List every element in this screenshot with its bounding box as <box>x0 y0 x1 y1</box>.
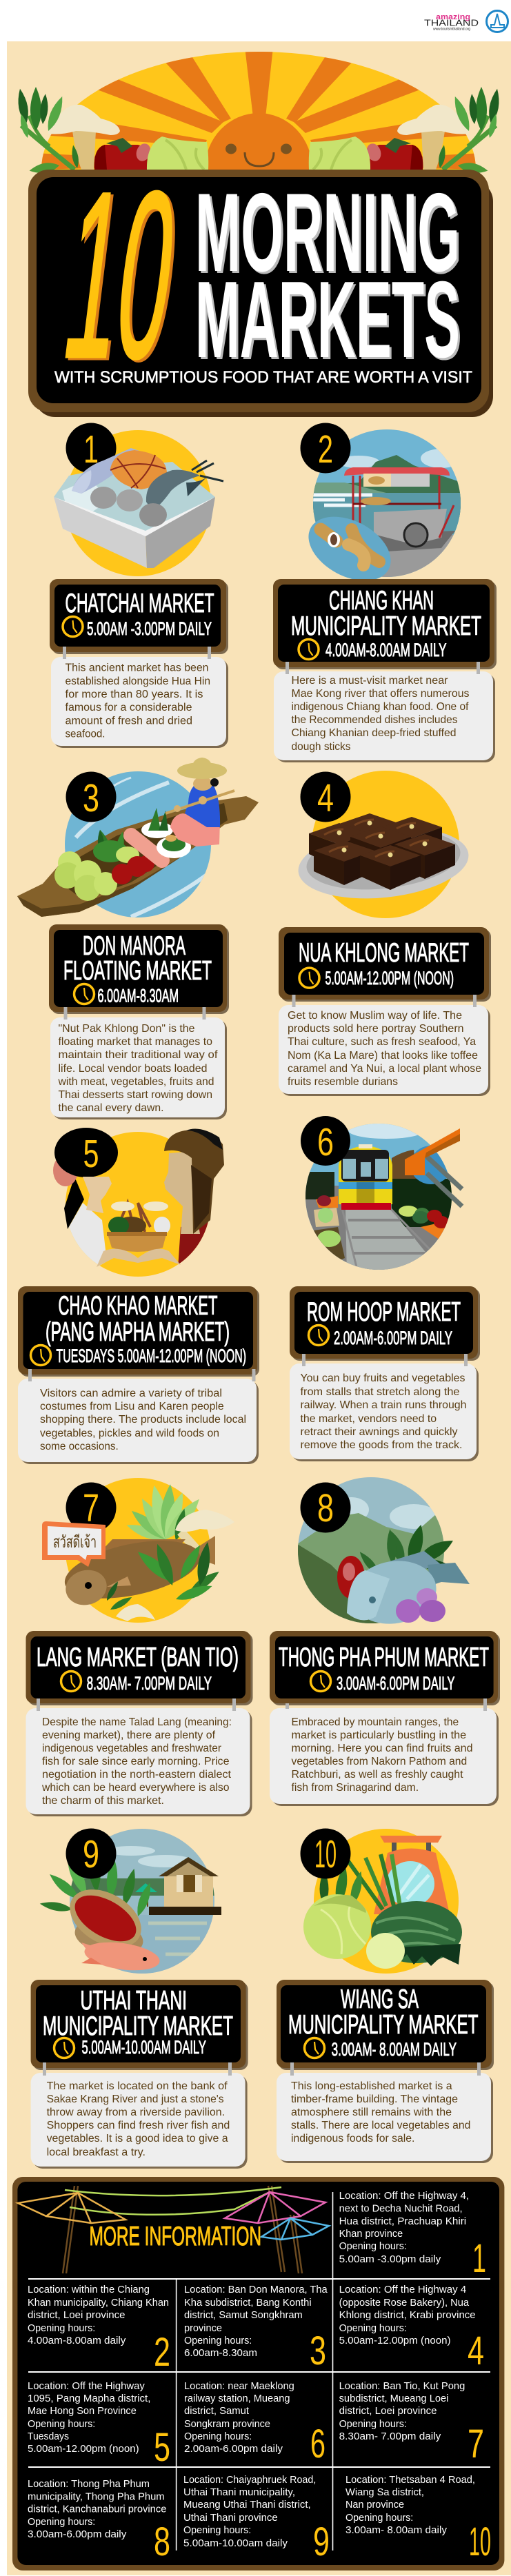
info: market 9 <box>183 2474 330 2564</box>
info: market 1: 1 <box>472 2236 486 2281</box>
onion <box>366 1933 405 1969</box>
info: market 2: district, Loei province <box>28 2309 126 2321</box>
board frame <box>28 170 493 417</box>
illustration: dessert plate <box>294 771 472 918</box>
description <box>18 1369 259 1464</box>
sign: uthai thani: 5.00AM-10.00AM DAILY <box>81 2037 206 2058</box>
info: market 10: Opening hours: <box>345 2512 413 2524</box>
info: market 6: Songkram province <box>184 2418 270 2430</box>
info: market 6: 2.00am-6.00pm daily <box>184 2443 283 2455</box>
info: market 8: 8 <box>154 2519 170 2564</box>
info: market 8: 3.00am-6.00pm daily <box>28 2528 127 2540</box>
market 2 <box>273 423 497 762</box>
illustration: tribal women with basket <box>53 1128 224 1277</box>
description: Get to know Muslim way of life. The <box>288 1010 462 1022</box>
sign: uthai thani: MUNICIPALITY MARKET <box>43 2011 233 2041</box>
market 4 <box>279 771 491 1096</box>
description: the canal every dawn. <box>58 1102 164 1114</box>
big number 10 <box>52 143 191 410</box>
info: market 9: 9 <box>313 2519 330 2564</box>
description: floating market that manages to <box>58 1036 212 1048</box>
description <box>31 2062 248 2169</box>
sign: uthai thani: UTHAI THANI <box>80 1986 187 2016</box>
info: market 6: 6 <box>310 2422 325 2466</box>
description: retract their awnings and quickly <box>301 1426 458 1438</box>
info: market 5: Opening hours: <box>28 2418 95 2430</box>
illustration: tribal women with basket: 5 <box>83 1132 99 1176</box>
description: with meat, vegetables, fruits and <box>58 1076 214 1088</box>
info: market 6 <box>184 2380 325 2466</box>
info: market 1: 5.00am -3.00pm daily <box>339 2253 441 2265</box>
clock icon <box>54 2038 74 2058</box>
description <box>277 2062 493 2163</box>
sign: wiang sa <box>277 1980 494 2070</box>
illustration: floating market boat <box>17 758 259 917</box>
basket of food <box>97 1201 181 1267</box>
sign: uthai thani <box>31 1980 248 2070</box>
info: market 7: Location: Ban Tio, Kut Pong <box>339 2380 465 2392</box>
pink fish <box>81 1938 161 1974</box>
market 9 <box>31 1828 248 2169</box>
illustration: seafood box <box>54 423 223 576</box>
description: which can be heard everywhere is also <box>41 1782 230 1794</box>
description: products sold here portray Southern <box>288 1023 464 1035</box>
description: This long-established market is a <box>291 2080 452 2092</box>
info: market 4: 4 <box>468 2329 484 2373</box>
plate of dough sticks <box>298 504 401 594</box>
food stall <box>344 467 454 547</box>
clock icon <box>30 1346 51 1365</box>
market 8 <box>270 1477 500 1806</box>
clock icon <box>61 1671 81 1692</box>
sign: don manora <box>49 924 229 1014</box>
info: market 3: Kha subdistrict, Bang Konthi <box>184 2297 312 2309</box>
description: Thai culture, such as fresh seafood, Ya <box>288 1036 476 1048</box>
description: railway. When a train runs through <box>301 1399 466 1411</box>
awning <box>405 1128 462 1206</box>
description: famous for a considerable <box>65 702 192 713</box>
info: market 10: Nan province <box>345 2499 404 2511</box>
clock icon <box>309 1325 328 1346</box>
illustration: railway market <box>301 1116 462 1275</box>
info: market 3: district, Samut Songkhram <box>184 2309 303 2321</box>
description: vegetables. It is a good idea to give a <box>47 2133 228 2144</box>
heading: MORE INFORMATION <box>90 2222 261 2251</box>
sign: chao khao: (PANG MAPHA MARKET) <box>46 1317 230 1347</box>
info: market 4: (opposite Rose Bakery), Nua <box>339 2297 470 2309</box>
info: market 7: 7 <box>468 2422 484 2466</box>
description: local breakfast a try. <box>47 2147 146 2158</box>
sack of chili <box>60 1878 151 1960</box>
info: market 2 <box>28 2284 170 2375</box>
sign: chiang khan: CHIANG KHAN <box>329 586 434 616</box>
description: the Recommended dishes includes <box>291 714 458 726</box>
sign: don manora: DON MANORA <box>83 931 186 961</box>
info: market 2: 2 <box>154 2330 170 2375</box>
description: seafood. <box>65 729 105 740</box>
speech bubble <box>42 1521 106 1567</box>
market 3 <box>17 758 259 1119</box>
info: market 8: district, Kanchanaburi province <box>28 2503 166 2515</box>
info: market 9: Opening hours: <box>183 2524 251 2536</box>
lettuce <box>147 136 208 170</box>
title board: 10 <box>52 143 188 408</box>
speech bubble: สวัสดีเจ้า <box>53 1533 97 1552</box>
info: market 5: Mae Hong Son Province <box>28 2405 137 2417</box>
description: indigenous Chiang khan food. One of <box>291 701 469 713</box>
info: market 2: 4.00am-8.00am daily <box>28 2335 126 2346</box>
description: evening market), there are plenty of <box>42 1730 216 1741</box>
description <box>290 1354 479 1461</box>
sign: thong pha phum <box>270 1631 500 1705</box>
description: indigenous foods for sale. <box>291 2133 414 2144</box>
info: market 8 <box>28 2478 170 2564</box>
boat <box>17 796 259 917</box>
mushroom <box>48 105 120 170</box>
info: market 4: 5.00am-12.00pm (noon) <box>339 2335 451 2346</box>
sign: lang market <box>26 1631 252 1705</box>
description: fish for sale since early morning. Price <box>42 1756 230 1767</box>
sign: chatchai market: 5.00AM -3.00PM DAILY <box>87 618 212 639</box>
description: life. Local vendor boats loaded <box>58 1063 207 1075</box>
sign: chao khao: TUESDAYS 5.00AM-12.00PM (NOON) <box>57 1346 246 1366</box>
market 6 <box>290 1116 480 1461</box>
stilt house <box>135 1857 221 1915</box>
herbs <box>16 87 80 176</box>
logo: amazing thailand: www.tourismthailand.org <box>433 28 470 32</box>
description: Ratchburi, as well as freshly caught <box>291 1769 463 1781</box>
sign: lang market: LANG MARKET (BAN TIO) <box>37 1643 239 1672</box>
beans <box>371 1901 462 1966</box>
info: market 5 <box>28 2380 170 2470</box>
description: remove the goods from the track. <box>301 1439 462 1451</box>
spring onions <box>348 1854 400 1909</box>
info: market 1: next to Decha Nuchit Road, <box>339 2202 463 2214</box>
info: market 1: Khan province <box>339 2228 403 2240</box>
illustration: fish and herbs <box>42 1478 234 1623</box>
illustration: fish and herbs: 7 <box>83 1486 99 1530</box>
info: market 8: Opening hours: <box>28 2516 95 2528</box>
description: Shoppers can find fresh river fish and <box>47 2120 230 2131</box>
info: market 4: Location: Off the Highway 4 <box>339 2284 466 2295</box>
smiling sun <box>205 113 312 226</box>
description <box>274 662 495 762</box>
info: market 6: railway station, Mueang <box>184 2393 290 2404</box>
description <box>50 1007 227 1119</box>
description: stalls. There are local vegetables and <box>291 2120 470 2131</box>
info: market 5: 5.00am-12.00pm (noon) <box>28 2443 139 2455</box>
description: the charm of this market. <box>42 1795 164 1807</box>
info: market 5: Tuesdays <box>28 2431 69 2442</box>
info: market 3: province <box>184 2322 222 2334</box>
sign: chatchai market: CHATCHAI MARKET <box>65 589 214 618</box>
chalk umbrellas <box>18 2186 329 2273</box>
description: dough sticks <box>291 741 350 753</box>
vegetables left <box>16 87 208 176</box>
goods on boat <box>54 808 191 901</box>
info: market 3: 3 <box>310 2329 326 2373</box>
description <box>26 1698 252 1816</box>
info: market 7 <box>339 2380 484 2466</box>
sign: chatchai market <box>50 579 228 654</box>
header logos <box>424 11 508 32</box>
description: timber-frame building. The vintage <box>291 2093 458 2105</box>
sun rays <box>41 52 476 170</box>
panel: more information <box>12 2177 504 2570</box>
info: market 2: Opening hours: <box>28 2322 95 2334</box>
info: market 3: Opening hours: <box>184 2335 252 2346</box>
description: Mae Kong river that offers numerous <box>291 688 469 700</box>
description: fish from Srinagarind dam. <box>291 1782 419 1794</box>
illustration: seafood box: 1 <box>83 427 99 471</box>
illustration: riverside house and chili: 9 <box>83 1832 99 1876</box>
illustration: mountains and fish: 8 <box>317 1486 334 1530</box>
info: market 8: Location: Thong Pha Phum <box>28 2478 150 2490</box>
sun illustration <box>18 52 499 173</box>
description: established alongside Hua Hin <box>65 676 210 687</box>
info: market 3: Location: Ban Don Manora, Tha <box>184 2284 328 2295</box>
description: Visitors can admire a variety of tribal <box>40 1388 222 1399</box>
description: amount of fresh and dried <box>65 716 192 727</box>
info: market 9: Location: Chaiyaphruek Road, <box>183 2474 316 2486</box>
info: market 6: Location: near Maeklong <box>184 2380 294 2392</box>
info: market 5: 1095, Pang Mapha district, <box>28 2393 150 2404</box>
description: negotiation in the north-eastern dialect <box>42 1769 232 1781</box>
clock icon <box>299 640 319 659</box>
title board <box>28 143 493 417</box>
market 1 <box>50 423 228 748</box>
info: market 3: 6.00am-8.30am <box>184 2347 257 2359</box>
illustration: riverside stall: 2 <box>318 427 333 471</box>
illustration: riverside house and chili <box>39 1828 221 1977</box>
illustration: riverside stall <box>301 423 461 579</box>
info: market 4: Khlong district, Krabi province <box>339 2309 476 2321</box>
description: Embraced by mountain ranges, the <box>291 1716 459 1728</box>
description: vegetables, pickles and wild foods on <box>40 1428 219 1439</box>
description: "Nut Pak Khlong Don" is the <box>58 1023 195 1035</box>
clock icon <box>310 1671 331 1692</box>
sign: wiang sa: WIANG SA <box>341 1985 419 2014</box>
sign: rom hoop <box>290 1286 480 1361</box>
description: Despite the name Talad Lang (meaning: <box>42 1716 232 1728</box>
description: Nom (Ka La Mare) that looks like toffee <box>288 1050 478 1062</box>
logo: amazing thailand <box>424 13 479 32</box>
description: some occasions. <box>40 1441 119 1452</box>
clock icon <box>63 616 83 637</box>
description: indigenous vegetables and freshwater <box>42 1743 222 1754</box>
info: market 10: Wiang Sa district, <box>345 2486 424 2498</box>
info: market 7: Opening hours: <box>339 2418 407 2430</box>
illustration: dessert plate: 4 <box>317 776 334 820</box>
info: market 10: Location: Thetsaban 4 Road, <box>345 2474 475 2486</box>
description: You can buy fruits and vegetables <box>301 1372 465 1384</box>
sign: don manora: FLOATING MARKET <box>63 956 212 986</box>
info: market 2: Khan municipality, Chiang Khan <box>28 2297 169 2309</box>
info: market 7: 8.30am- 7.00pm daily <box>339 2431 441 2442</box>
description: the market, vendors need to <box>301 1413 437 1425</box>
description: This ancient market has been <box>65 662 208 674</box>
description: Thai desserts start rowing down <box>58 1089 212 1101</box>
info: market 10: 3.00am- 8.00am daily <box>345 2524 448 2536</box>
info: market 4: Opening hours: <box>339 2322 407 2334</box>
illustration: railway market: 6 <box>317 1120 334 1164</box>
info: market 7: district, Loei province <box>339 2405 437 2417</box>
sign: chiang khan <box>273 579 497 669</box>
description: throw away from a riverside pavilion. <box>47 2107 225 2118</box>
description: The market is located on the bank of <box>47 2080 228 2092</box>
vendor <box>166 758 234 846</box>
description <box>270 1698 499 1806</box>
description: costumes from Lisu and Karen people <box>40 1401 224 1412</box>
illustration: floating market boat: 3 <box>83 776 99 820</box>
cabbage <box>303 1894 371 1959</box>
train <box>339 1144 392 1210</box>
info: market 3 <box>184 2284 328 2373</box>
sign: nua khlong <box>279 927 491 1002</box>
info: market 2: Location: within the Chiang <box>28 2284 150 2295</box>
description: Here is a must-visit market near <box>291 675 448 687</box>
info: market 10 <box>345 2474 491 2564</box>
illustration: scale and vegetables <box>301 1828 462 1974</box>
info: market 6: Opening hours: <box>184 2431 252 2442</box>
info: market 7: subdistrict, Mueang Loei <box>339 2393 448 2404</box>
info: market 9: Mueang Uthai Thani district, <box>183 2499 311 2511</box>
info: market 1 <box>339 2190 486 2281</box>
info: market 9: Uthai Thani municipality, <box>183 2486 295 2498</box>
logo: blue seal <box>487 11 508 32</box>
info: market 9: Uthai Thani province <box>183 2512 278 2524</box>
illustration: scale and vegetables: 10 <box>314 1832 337 1876</box>
info: market 4 <box>339 2284 484 2373</box>
weighing scale <box>374 1836 450 1914</box>
title board: 10 <box>55 145 191 410</box>
description: vegetables from Nakorn Pathom and <box>291 1756 467 1767</box>
grid lines <box>28 2192 490 2550</box>
info: market 1: Location: Off the Highway 4, <box>339 2190 469 2202</box>
sign: don manora: 6.00AM-8.30AM <box>98 986 179 1006</box>
subtitle: WITH SCRUMPTIOUS FOOD THAT ARE WORTH A VISIT <box>54 368 472 387</box>
info: market 9: 5.00am-10.00am daily <box>183 2537 288 2549</box>
description <box>279 995 490 1096</box>
description: from stalls that stretch along the <box>301 1386 460 1398</box>
clock icon <box>299 968 319 988</box>
description: shopping there. The products include local <box>40 1414 246 1426</box>
tomato <box>94 138 155 170</box>
description: atmosphere still remains with the <box>291 2107 452 2118</box>
info: market 1: Opening hours: <box>339 2240 407 2252</box>
sign: chao khao <box>18 1286 259 1377</box>
clock icon <box>305 2038 324 2058</box>
greens <box>39 1845 154 1918</box>
logo: amazing thailand: THAILAND <box>424 18 479 28</box>
illustration: mountains and fish <box>297 1477 470 1630</box>
vegetables right <box>309 87 501 176</box>
clock icon <box>74 984 94 1004</box>
description: for more than 80 years. It is <box>65 689 203 700</box>
sign: lang market: 8.30AM- 7.00PM DAILY <box>87 1673 212 1694</box>
description: Sakae Krang River and just a stone's <box>47 2093 224 2105</box>
market 5 <box>18 1128 259 1464</box>
sign: chao khao: CHAO KHAO MARKET <box>58 1291 218 1321</box>
description <box>51 647 228 748</box>
info: market 6: district, Samut <box>184 2405 250 2417</box>
info: market 5: 5 <box>154 2425 170 2470</box>
info: market 8: municipality, Thong Pha Phum <box>28 2491 165 2502</box>
description: fruits resemble durians <box>288 1076 398 1088</box>
description: maintain their traditional way of <box>58 1049 218 1061</box>
market 7 <box>26 1478 252 1816</box>
description: Chiang Khanian deep-fried stuffed <box>291 727 457 739</box>
description: caramel and Ya Nui, a local plant whose <box>288 1063 481 1075</box>
description: morning. Here you can find fruits and <box>291 1743 473 1754</box>
description: market is particularly bustling in the <box>291 1730 466 1741</box>
market 10 <box>277 1828 494 2163</box>
info: market 5: Location: Off the Highway <box>28 2380 145 2392</box>
info: market 1: Hua district, Prachuap Khiri <box>339 2215 466 2227</box>
logo: amazing thailand: amazing <box>436 13 470 21</box>
